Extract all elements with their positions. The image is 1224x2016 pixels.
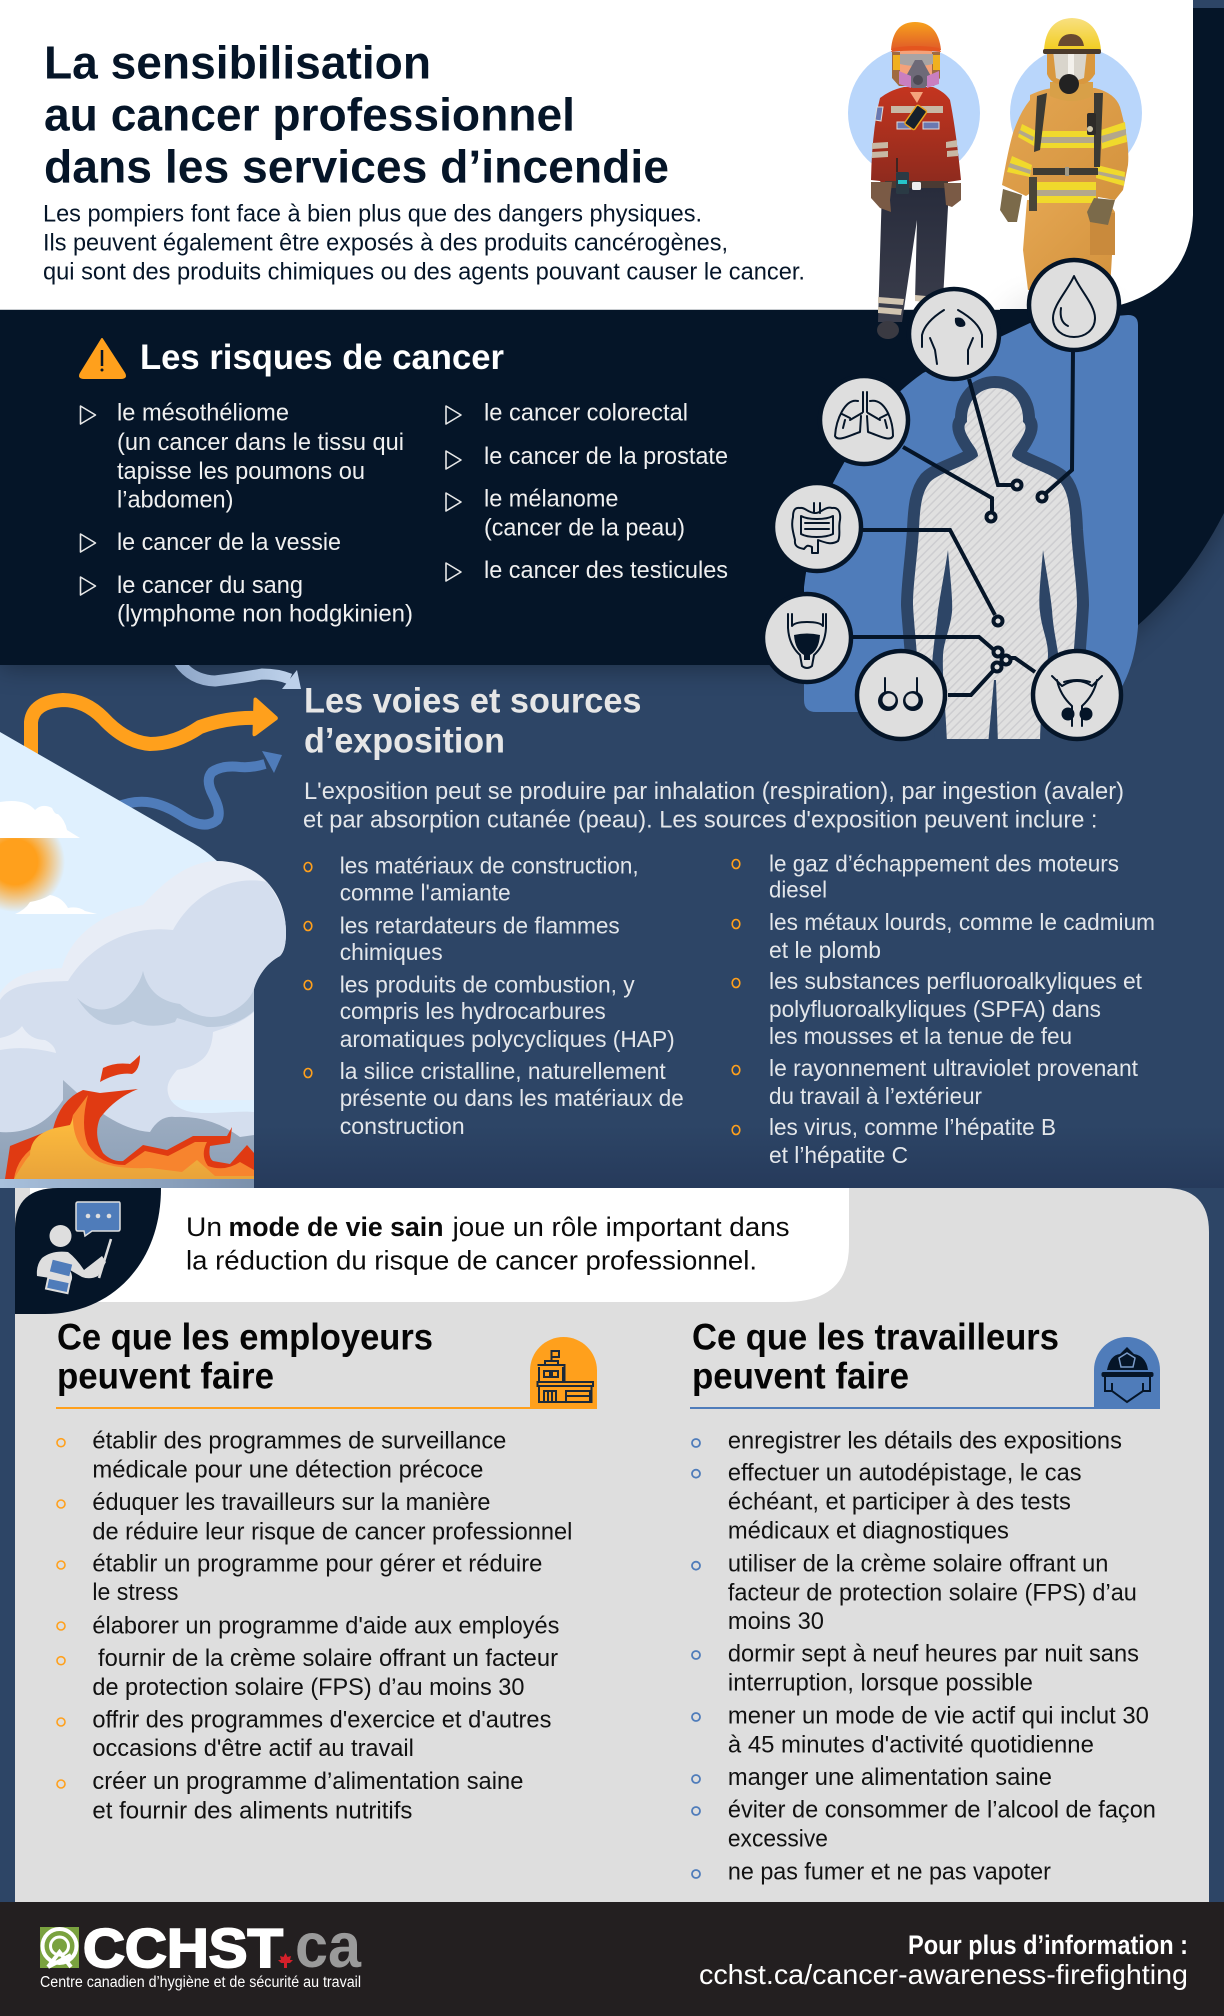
list: cancer risks, left column: tapisse les poumons ou xyxy=(117,458,365,485)
icon: presenter with speech bubble xyxy=(15,1188,161,1314)
body silhouette xyxy=(913,388,1077,745)
list: worker actions: mener un mode de vie actif qui inclut 30 xyxy=(728,1702,1149,1729)
banner: healthy lifestyle message: Un xyxy=(186,1212,222,1242)
list: cancer risks, left column: le mésothéliome xyxy=(117,400,289,427)
blue backing panel xyxy=(804,315,1138,712)
arrow: blue xyxy=(100,751,282,825)
list: exposure sources, right column: polyfluoroalkyliques (SPFA) dans xyxy=(769,996,1101,1022)
list: employer actions: occasions d'être actif au travail xyxy=(92,1735,414,1762)
list: worker actions: effectuer un autodépistage, le cas xyxy=(728,1460,1082,1487)
logo: CCHST.ca: Centre canadien d’hygiène et de sécurité au travail xyxy=(40,1974,361,1991)
list: worker actions: utiliser de la crème solaire offrant un xyxy=(728,1551,1108,1578)
list: cancer risks, right column: le cancer de la prostate xyxy=(484,443,728,470)
logo: CCHST.ca: ca xyxy=(295,1911,362,1981)
exposure intro text: L'exposition peut se produire par inhalation (respiration), par ingestion (avaler) xyxy=(304,778,1124,805)
list: exposure sources, right column: et le plomb xyxy=(769,937,881,963)
list: worker actions: enregistrer les détails des expositions xyxy=(728,1427,1122,1454)
list: exposure sources, right column: le rayonnement ultraviolet provenant xyxy=(769,1055,1138,1081)
logo: CCHST.ca: CCHST xyxy=(83,1917,283,1979)
icon: lungs xyxy=(820,376,908,464)
list: employer actions: offrir des programmes d'exercice et d'autres xyxy=(92,1706,551,1733)
list: cancer risks, right column: le cancer colorectal xyxy=(484,400,688,427)
icon: testicles xyxy=(857,651,945,739)
heading: exposure routes and sources: Les voies et sources xyxy=(304,682,642,721)
list: worker actions: échéant, et participer à des tests xyxy=(728,1488,1071,1515)
list: worker actions: moins 30 xyxy=(728,1608,824,1635)
list: cancer risks, right column: le cancer des testicules xyxy=(484,557,728,584)
intro text xyxy=(43,201,805,285)
list: worker actions: médicaux et diagnostiques xyxy=(728,1517,1009,1544)
title: au cancer professionnel xyxy=(44,89,575,141)
arrow: grey-blue xyxy=(174,665,301,689)
list: exposure sources, left column: les produits de combustion, y xyxy=(340,972,635,998)
list: exposure sources, left column: les retardateurs de flammes xyxy=(340,912,620,938)
list: exposure sources, left column xyxy=(304,852,684,1139)
list: worker actions xyxy=(692,1427,1156,1885)
list: cancer risks, left column: l’abdomen) xyxy=(117,487,234,514)
list: exposure sources, left column: les matériaux de construction, xyxy=(340,852,639,878)
intro text: qui sont des produits chimiques ou des agents pouvant causer le cancer. xyxy=(43,258,805,285)
header panel xyxy=(0,0,1193,309)
list: exposure sources, left column: compris les hydrocarbures xyxy=(340,998,606,1024)
title xyxy=(44,37,669,193)
list: exposure sources, right column: les virus, comme l’hépatite B xyxy=(769,1114,1056,1140)
list: exposure sources, right column: et l’hépatite C xyxy=(769,1142,908,1168)
footer bar xyxy=(0,1902,1224,2016)
list: employer actions: de réduire leur risque de cancer professionnel xyxy=(92,1518,572,1545)
list: cancer risks, left column: (un cancer dans le tissu qui xyxy=(117,429,404,456)
list: employer actions xyxy=(57,1427,572,1824)
heading: exposure routes and sources: d’exposition xyxy=(304,722,505,761)
list: cancer risks, right column: (cancer de la peau) xyxy=(484,515,685,542)
footer link: cchst.ca/cancer-awareness-firefighting xyxy=(699,1959,1188,1990)
heading: exposure routes and sources xyxy=(304,682,642,761)
icon: warning triangle xyxy=(80,339,125,378)
icon: prostate xyxy=(1033,651,1121,739)
icon: bladder xyxy=(763,594,851,682)
banner: healthy lifestyle message xyxy=(30,1188,849,1302)
banner: healthy lifestyle message: joue un rôle important dans xyxy=(452,1212,790,1242)
list: cancer risks, left column: le cancer du sang xyxy=(117,572,303,599)
banner: healthy lifestyle message: mode de vie sain xyxy=(228,1212,444,1242)
list: employer actions: créer un programme d’alimentation saine xyxy=(92,1768,523,1795)
intro text: Ils peuvent également être exposés à des produits cancérogènes, xyxy=(43,230,728,257)
arrow: orange xyxy=(31,698,277,770)
list: exposure sources, left column: aromatiques polycycliques (HAP) xyxy=(340,1026,675,1052)
list: worker actions: à 45 minutes d'activité quotidienne xyxy=(728,1731,1094,1758)
heading: what workers can do xyxy=(690,1316,1160,1409)
section background: exposure xyxy=(0,300,1224,1188)
firefighter in turnout gear xyxy=(1000,18,1128,290)
list: exposure sources, left column: présente ou dans les matériaux de xyxy=(340,1085,684,1111)
heading: what workers can do: peuvent faire xyxy=(692,1355,909,1396)
icon: blood drop xyxy=(1029,260,1119,350)
heading: what employers can do xyxy=(56,1316,597,1409)
connector lines xyxy=(852,350,1073,695)
title: dans les services d’incendie xyxy=(44,141,669,193)
list: exposure sources, left column: chimiques xyxy=(340,939,443,965)
blue circles behind firefighters xyxy=(848,47,1142,179)
list: cancer risks, left column: le cancer de la vessie xyxy=(117,529,341,556)
title: La sensibilisation xyxy=(44,37,431,89)
footer link xyxy=(699,1930,1188,1990)
list: employer actions: de protection solaire (FPS) d’au moins 30 xyxy=(92,1674,524,1701)
icon: maple leaf xyxy=(278,1953,293,1968)
list: employer actions: le stress xyxy=(92,1579,178,1606)
icon: intestines xyxy=(773,483,861,571)
list: worker actions: éviter de consommer de l’alcool de façon xyxy=(728,1796,1156,1823)
list: employer actions: établir des programmes de surveillance xyxy=(92,1427,506,1454)
illustration: sky, smoke and fire xyxy=(0,732,286,1188)
list: cancer risks, right column xyxy=(446,400,728,584)
list: employer actions: éduquer les travailleurs sur la manière xyxy=(92,1489,490,1516)
list: exposure sources, right column: les mousses et la tenue de feu xyxy=(769,1023,1072,1049)
footer link: Pour plus d’information : xyxy=(908,1930,1188,1960)
list: employer actions: élaborer un programme d'aide aux employés xyxy=(92,1612,559,1639)
list: worker actions: manger une alimentation saine xyxy=(728,1764,1052,1791)
list: employer actions: et fournir des aliments nutritifs xyxy=(92,1797,412,1824)
banner: healthy lifestyle message: la réduction du risque de cancer professionnel. xyxy=(186,1245,757,1275)
exposure intro text xyxy=(303,778,1124,834)
list: exposure sources, right column: diesel xyxy=(769,877,827,903)
heading: cancer risks: Les risques de cancer xyxy=(140,338,504,377)
list: worker actions: ne pas fumer et ne pas vapoter xyxy=(728,1858,1051,1885)
human body diagram with organ callouts xyxy=(763,260,1138,745)
firefighter in red jacket with respirator xyxy=(871,22,961,339)
list: cancer risks, right column: le mélanome xyxy=(484,486,618,513)
list: exposure sources, right column: le gaz d’échappement des moteurs xyxy=(769,851,1119,877)
icon: firefighter helmet xyxy=(1094,1337,1160,1409)
heading: what workers can do: Ce que les travailleurs xyxy=(692,1316,1059,1357)
icon: fire station xyxy=(530,1337,597,1409)
icon: logo emblem xyxy=(40,1927,79,1968)
list: worker actions: facteur de protection solaire (FPS) d’au xyxy=(728,1580,1137,1607)
list: employer actions: fournir de la crème solaire offrant un facteur xyxy=(98,1645,558,1672)
list: exposure sources, right column: les substances perfluoroalkyliques et xyxy=(769,968,1142,994)
list: worker actions: dormir sept à neuf heures par nuit sans xyxy=(728,1641,1139,1668)
intro text: Les pompiers font face à bien plus que des dangers physiques. xyxy=(43,201,702,228)
list: cancer risks, left column: (lymphome non hodgkinien) xyxy=(117,601,413,628)
list: employer actions: médicale pour une détection précoce xyxy=(92,1456,483,1483)
list: worker actions: interruption, lorsque possible xyxy=(728,1670,1033,1697)
panel: what can be done xyxy=(15,1188,1209,1902)
list: exposure sources, left column: comme l'amiante xyxy=(340,880,511,906)
icon: breast xyxy=(909,289,999,379)
list: employer actions: établir un programme pour gérer et réduire xyxy=(92,1551,542,1578)
exposure intro text: et par absorption cutanée (peau). Les sources d'exposition peuvent inclure : xyxy=(303,807,1098,834)
list: exposure sources, left column: la silice cristalline, naturellement xyxy=(340,1058,666,1084)
heading: what employers can do: Ce que les employeurs xyxy=(57,1316,433,1357)
list: exposure sources, right column xyxy=(732,851,1155,1168)
list: cancer risks, left column xyxy=(80,400,413,628)
flames xyxy=(5,1055,254,1179)
heading: what employers can do: peuvent faire xyxy=(57,1355,274,1396)
logo: CCHST.ca xyxy=(40,1911,362,1991)
section background: risks xyxy=(0,0,1224,665)
list: exposure sources, left column: construction xyxy=(340,1113,465,1139)
list: exposure sources, right column: du travail à l’extérieur xyxy=(769,1083,982,1109)
list: exposure sources, right column: les métaux lourds, comme le cadmium xyxy=(769,909,1155,935)
list: worker actions: excessive xyxy=(728,1826,828,1853)
